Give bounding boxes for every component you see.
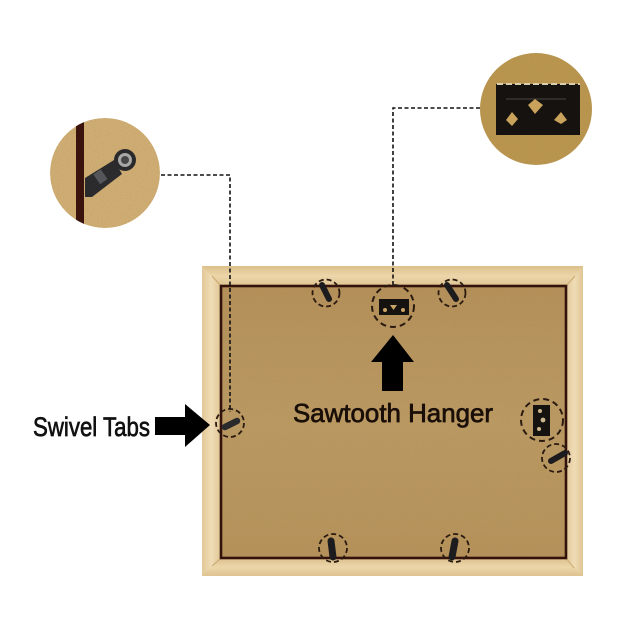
icon: swivel tab bottom left — [319, 534, 347, 562]
backing board — [221, 286, 566, 558]
icon: sawtooth hanger on frame — [372, 285, 414, 327]
callout line: hanger detail — [393, 108, 480, 287]
icon: swivel tab left — [216, 409, 244, 437]
arrow: right to swivel tab — [155, 404, 210, 447]
icon: swivel tab top right — [438, 280, 466, 306]
callout line: swivel tab detail — [161, 175, 230, 412]
heading: Swivel Tabs: Swivel Tabs — [33, 412, 150, 442]
backing board edge — [221, 286, 566, 558]
panel: wooden picture frame — [202, 266, 583, 576]
icon: swivel tab bottom right — [441, 534, 469, 562]
callout: sawtooth hanger magnified — [480, 53, 592, 165]
icon: swivel tab right — [542, 444, 570, 472]
frame: outer wood — [202, 266, 583, 576]
icon: vertical sawtooth hanger — [521, 399, 563, 441]
arrow: up to sawtooth hanger — [371, 335, 414, 391]
infographic: frame back diagram — [34, 53, 592, 576]
callout: swivel tab magnified — [50, 118, 160, 228]
icon: swivel tab top left — [312, 280, 340, 306]
heading: Sawtooth Hanger: Sawtooth Hanger — [293, 398, 493, 428]
